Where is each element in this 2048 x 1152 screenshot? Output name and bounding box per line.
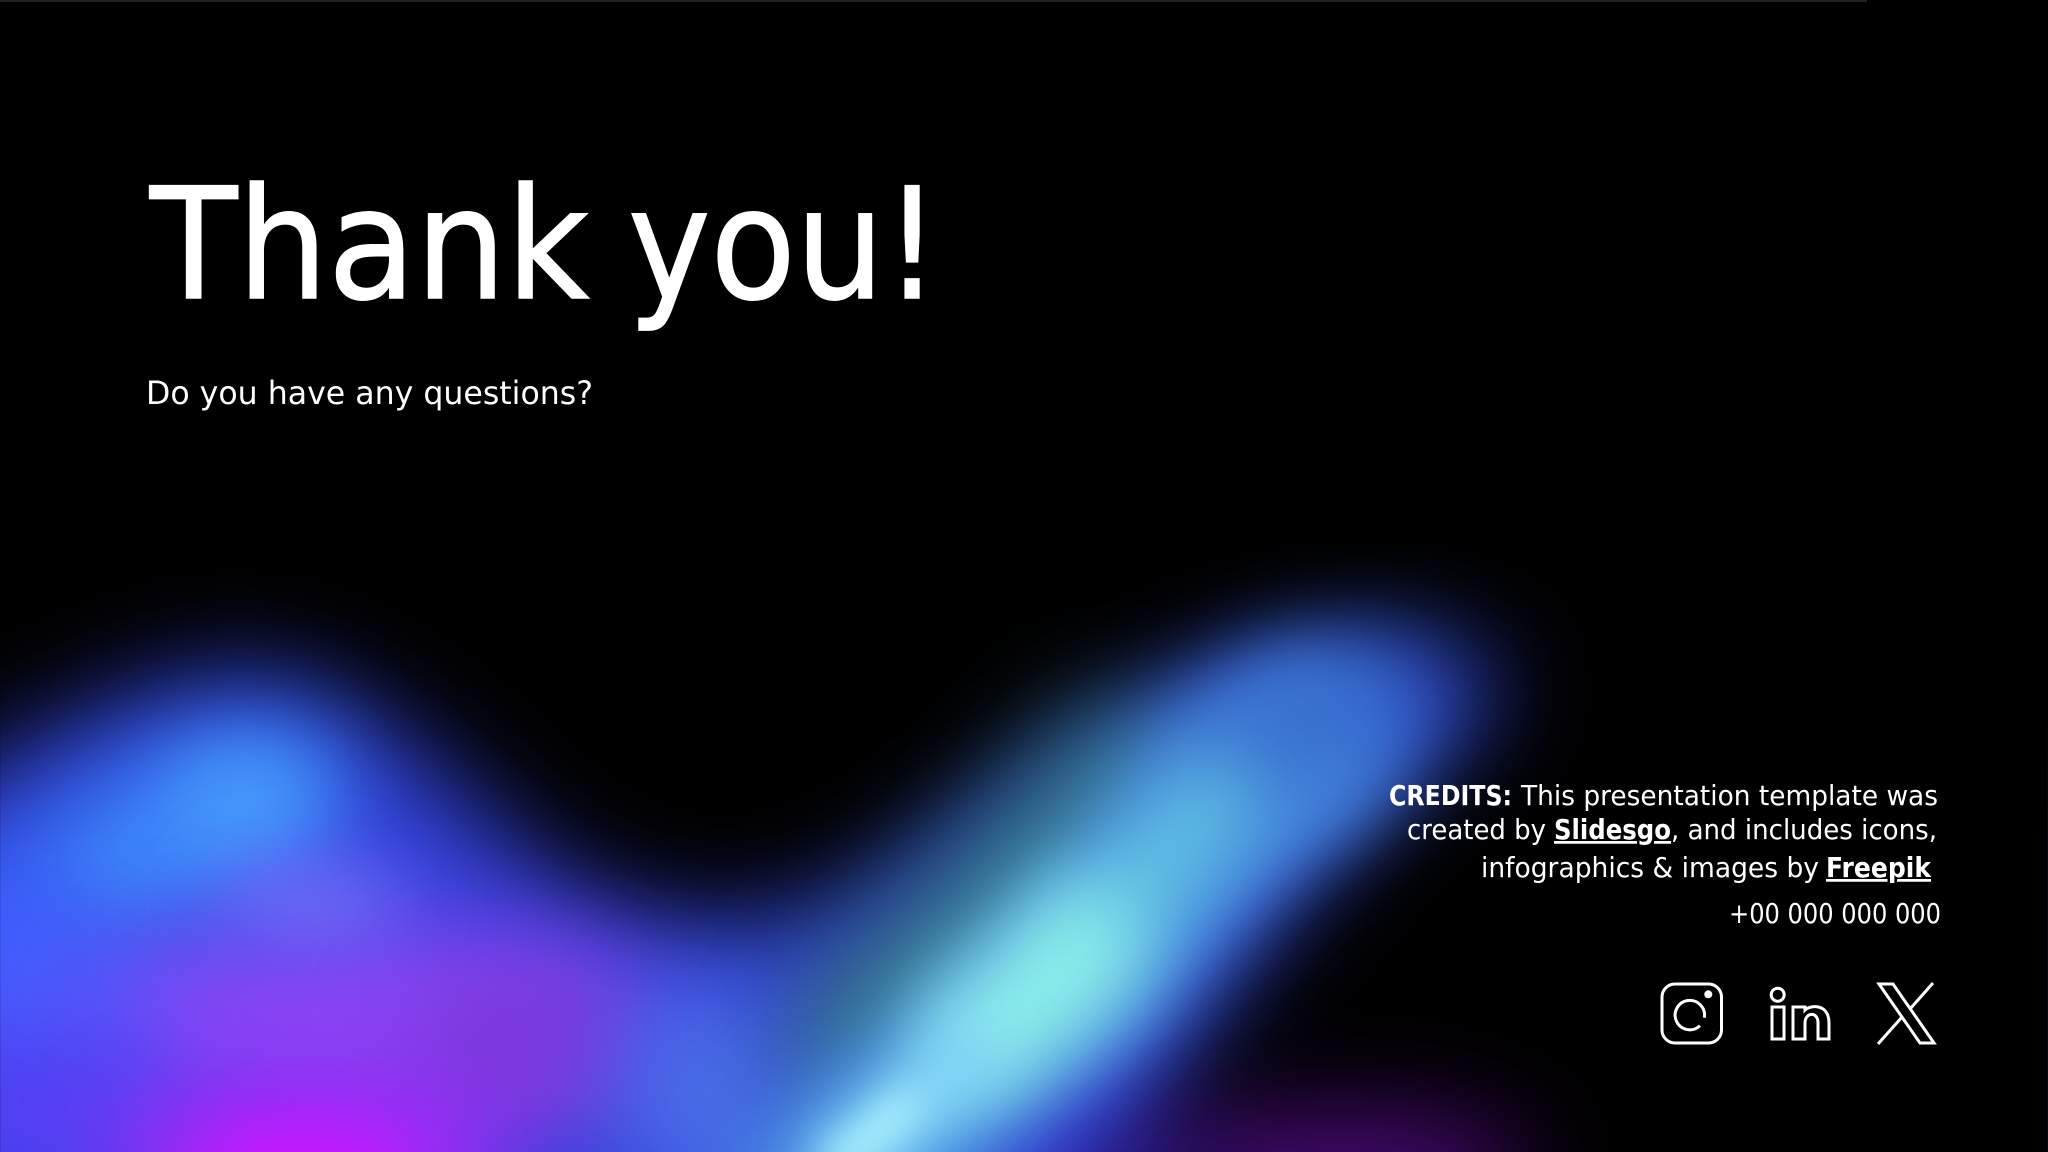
top edge line [0, 0, 1867, 2]
credits text: Freepik [1826, 852, 1932, 884]
credits text: Slidesgo [1554, 814, 1671, 846]
credits text: , and includes icons, [1671, 814, 1937, 846]
phone number: +00 000 000 000 [1729, 898, 1941, 930]
credits text: infographics & images by [1481, 852, 1819, 884]
icon: linkedin [1771, 988, 1829, 1039]
title: you! [628, 156, 940, 335]
title: Thank [149, 156, 589, 335]
icon: instagram [1662, 984, 1722, 1043]
credits text: created by [1407, 814, 1546, 846]
subtitle: Do you have any questions? [146, 374, 593, 412]
icon: X [1878, 983, 1934, 1044]
title [149, 156, 940, 335]
credits text: This presentation template was [1520, 780, 1938, 812]
credits text: CREDITS: [1389, 780, 1512, 812]
credits text [1389, 780, 1938, 884]
